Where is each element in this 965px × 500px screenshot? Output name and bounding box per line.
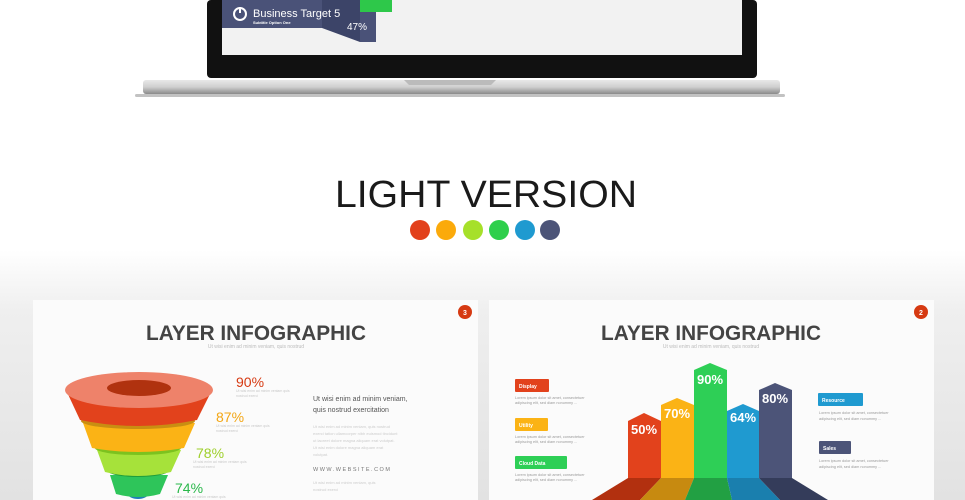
laptop screen content: business target bar: Business Target 5 xyxy=(253,8,340,20)
panel: bar slide: Lorem ipsum dolor sit amet, consectetuer xyxy=(515,396,585,400)
percentages: Ut wisi enim ad minim veniam quis xyxy=(172,495,226,499)
text block: nostrud exerci xyxy=(313,487,338,492)
text block: Ut wisi enim ad minim veniam, quis xyxy=(313,480,375,485)
text block: exerci tation ullamcorper nibh euismod tincidunt xyxy=(313,431,398,436)
panel: funnel slide: Ut wisi enim ad minim veniam, quis nostrud xyxy=(208,344,304,350)
color dots xyxy=(410,220,560,240)
panel: bar slide: Lorem ipsum dolor sit amet, consectetuer xyxy=(515,473,585,477)
laptop screen content: business target bar: Subtitle Option One xyxy=(253,20,291,25)
panel: bar slide: adipiscing elit, sed diam nonummy ... xyxy=(515,440,577,444)
panel: bar slide: Lorem ipsum dolor sit amet, consectetuer xyxy=(515,435,585,439)
percentages: Ut wisi enim ad minim veniam quis xyxy=(216,424,270,428)
text block: Ut wisi enim ad minim veniam, xyxy=(313,396,408,403)
panel: bar slide: adipiscing elit, sed diam nonummy ... xyxy=(819,465,881,469)
legend labels: Utility xyxy=(519,423,533,429)
percentages: nostrud exerci xyxy=(216,429,238,433)
panel: bar slide: Lorem ipsum dolor sit amet, consectetuer xyxy=(819,411,889,415)
percentages: 74% xyxy=(175,480,203,496)
percentages: Ut wisi enim ad minim veniam quis xyxy=(236,389,290,393)
panel: bar slide: adipiscing elit, sed diam nonummy ... xyxy=(515,401,577,405)
panel: bar slide: adipiscing elit, sed diam nonummy ... xyxy=(515,478,577,482)
panel: funnel slide xyxy=(33,300,478,500)
floor xyxy=(592,478,828,500)
percentages: 78% xyxy=(196,445,224,461)
title: LIGHT VERSION xyxy=(335,174,637,216)
percentages: 87% xyxy=(216,409,244,425)
text block: Ut wisi enim dolore magna aliquam erat xyxy=(313,445,384,450)
legend labels xyxy=(515,379,863,469)
legend labels: Display xyxy=(519,384,537,390)
legend labels: Resource xyxy=(822,398,845,404)
percentages: nostrud exerci xyxy=(193,465,215,469)
percentages: 90% xyxy=(236,374,264,390)
panel: bar slide: LAYER INFOGRAPHIC xyxy=(601,322,821,345)
panel: funnel slide: LAYER INFOGRAPHIC xyxy=(146,322,366,345)
panel: bar slide: 2 xyxy=(919,310,923,317)
panel: bar slide: Lorem ipsum dolor sit amet, consectetuer xyxy=(819,459,889,463)
bar chart: 90% xyxy=(697,372,723,387)
text block: WWW.WEBSITE.COM xyxy=(313,467,391,473)
percentages: Ut wisi enim ad minim veniam quis xyxy=(193,460,247,464)
funnel chart xyxy=(65,372,213,499)
text block: quis nostrud exercitation xyxy=(313,407,389,414)
bar chart xyxy=(628,363,792,478)
panel: bar slide xyxy=(489,300,934,500)
bar chart: 50% xyxy=(631,422,657,437)
legend labels: Cloud Data xyxy=(519,461,546,467)
bar chart: 80% xyxy=(762,391,788,406)
text block xyxy=(313,396,408,492)
text block: ut laoreet dolore magna aliquam erat volutpat. xyxy=(313,438,395,443)
bar chart: 70% xyxy=(664,406,690,421)
legend labels: Sales xyxy=(823,446,836,452)
laptop mockup xyxy=(135,0,785,97)
panel: bar slide: adipiscing elit, sed diam nonummy ... xyxy=(819,417,881,421)
text block: Ut wisi enim ad minim veniam, quis nostrud xyxy=(313,424,390,429)
laptop screen content: business target bar xyxy=(222,0,392,42)
text block: volutpat. xyxy=(313,452,328,457)
laptop screen content: business target bar: 47% xyxy=(347,22,367,33)
panel: bar slide: Ut wisi enim ad minim veniam, quis nostrud xyxy=(663,344,759,350)
panel: funnel slide: 3 xyxy=(463,310,467,317)
bar chart: 64% xyxy=(730,410,756,425)
percentages: nostrud exerci xyxy=(236,394,258,398)
percentages xyxy=(172,374,290,499)
